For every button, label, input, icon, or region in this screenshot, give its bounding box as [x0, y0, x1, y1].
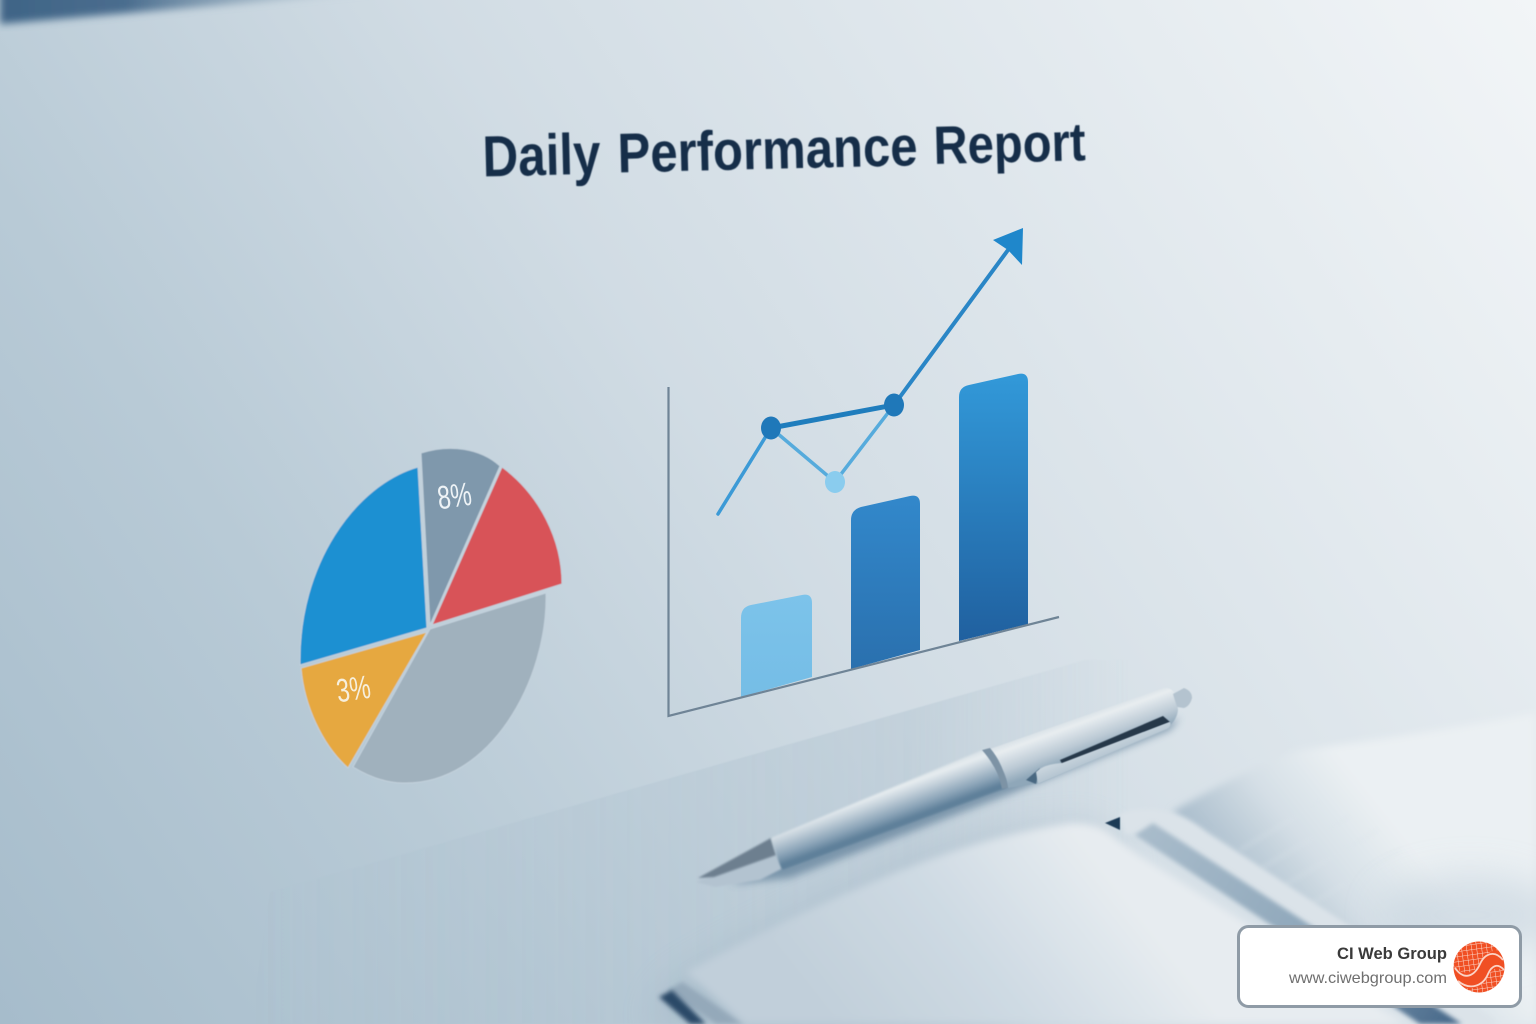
line segment: dark upper — [771, 405, 894, 428]
pen tip cone — [698, 838, 776, 878]
notebook — [650, 713, 1536, 1024]
badge logo — [1453, 941, 1505, 993]
badge url: www.ciwebgroup.com — [1288, 970, 1447, 987]
notebook right page — [1172, 713, 1536, 1024]
data point two — [884, 394, 904, 416]
bar: small — [741, 595, 812, 697]
title word: Report: Report — [933, 112, 1086, 176]
table surface below the sheet — [250, 660, 1130, 1024]
spine strip — [1135, 823, 1462, 1024]
brand badge — [1238, 926, 1520, 1006]
line segment: light dip — [771, 405, 894, 482]
pen clip — [1036, 722, 1171, 784]
spine highlight band — [1122, 821, 1490, 1024]
bar chart — [668, 374, 1059, 716]
notebook dark cover — [659, 990, 706, 1024]
pie slice: grey — [353, 593, 546, 783]
notebook shadow — [650, 825, 1130, 1024]
notebook lower right shade — [1380, 875, 1536, 955]
pie chart — [300, 448, 562, 783]
pen — [696, 688, 1192, 887]
title — [482, 112, 1086, 189]
line segment: rising start — [718, 428, 771, 514]
badge box — [1238, 926, 1520, 1006]
title word: Daily: Daily — [482, 122, 601, 189]
pen barrel — [771, 749, 1006, 870]
trend line with arrow — [718, 228, 1023, 514]
notebook page stripes — [1240, 802, 1400, 905]
pie slice: red — [432, 467, 562, 625]
label: 8%: 8% — [435, 475, 474, 516]
data point one — [761, 416, 781, 440]
top edge shadow — [0, 0, 420, 24]
logo lattice lower — [1466, 968, 1504, 992]
pen shadow — [730, 718, 1180, 884]
pie slice: blue — [300, 467, 427, 665]
label: 3%: 3% — [334, 668, 373, 709]
pen crevice — [1026, 768, 1040, 784]
chart axes — [668, 387, 1059, 716]
pen clip slot — [1060, 716, 1170, 764]
spine dark notch — [1105, 817, 1120, 830]
logo lattice upper — [1454, 942, 1498, 973]
pie slice: slate with 8% — [421, 448, 500, 625]
pen tip lower — [696, 852, 783, 887]
pen ring — [982, 748, 1008, 789]
notebook left page — [686, 823, 1405, 1024]
logo waves — [1455, 954, 1504, 986]
badge name: CI Web Group — [1337, 944, 1447, 963]
pen upper body — [990, 688, 1178, 788]
notebook cover strip — [668, 982, 745, 1024]
line segment: arrow shaft — [894, 250, 1008, 405]
data point light — [825, 471, 845, 493]
pie slice: orange with 3% — [301, 632, 427, 768]
arrow head — [993, 228, 1023, 265]
bar: medium — [851, 496, 920, 669]
title word: Performance: Performance — [617, 114, 918, 184]
bar: tall — [959, 374, 1028, 641]
logo disc — [1453, 941, 1505, 993]
pen clicker — [1173, 688, 1192, 708]
